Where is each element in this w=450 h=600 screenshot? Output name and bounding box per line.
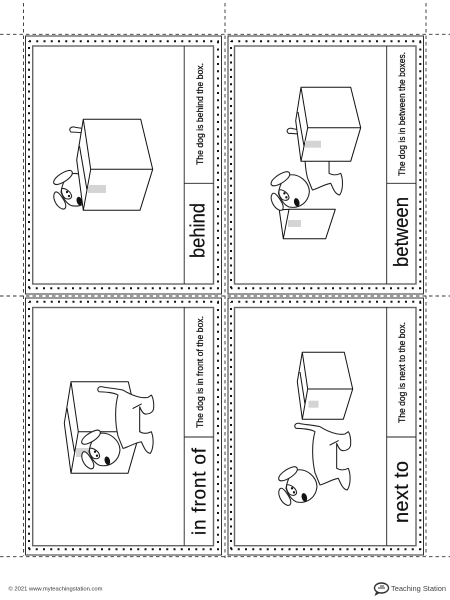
- icon: dog: [279, 423, 351, 505]
- word: next to: next to: [391, 461, 413, 523]
- panel: between: [228, 36, 424, 294]
- icon: dog: [82, 387, 154, 469]
- word: between: between: [391, 197, 413, 267]
- icon: box: [64, 382, 140, 473]
- illustration: dog behind box: [54, 119, 153, 210]
- illustration: dog next to box: [279, 352, 353, 505]
- sentence: between: The dog is in between the boxes.: [397, 52, 408, 176]
- icon: small box: [279, 209, 335, 239]
- sentence: next to: The dog is next to the box.: [397, 322, 408, 423]
- icon: box: [77, 119, 153, 210]
- icon: box: [297, 352, 353, 419]
- sentence: behind: The dog is behind the box.: [195, 63, 206, 165]
- logo: Teaching Station: [374, 583, 446, 596]
- word: behind: behind: [188, 203, 210, 258]
- logo text: Teaching Station: [391, 584, 446, 593]
- icon: big box: [296, 87, 361, 161]
- word: in front of: in front of: [190, 447, 210, 535]
- illustration: dog between boxes: [271, 87, 361, 239]
- illustration: dog in front of box: [64, 382, 154, 473]
- icon: dog: [271, 128, 343, 210]
- icon: speech bubble: [374, 583, 388, 596]
- icon: dog: [54, 127, 126, 209]
- sentence: in front of: The dog is in front of the box.: [195, 316, 206, 428]
- panel: next to: [228, 298, 424, 555]
- panel: in front of: [26, 298, 222, 555]
- copyright footer: © 2021 www.myteachingstation.com: [8, 586, 103, 592]
- panel: behind: [26, 36, 222, 294]
